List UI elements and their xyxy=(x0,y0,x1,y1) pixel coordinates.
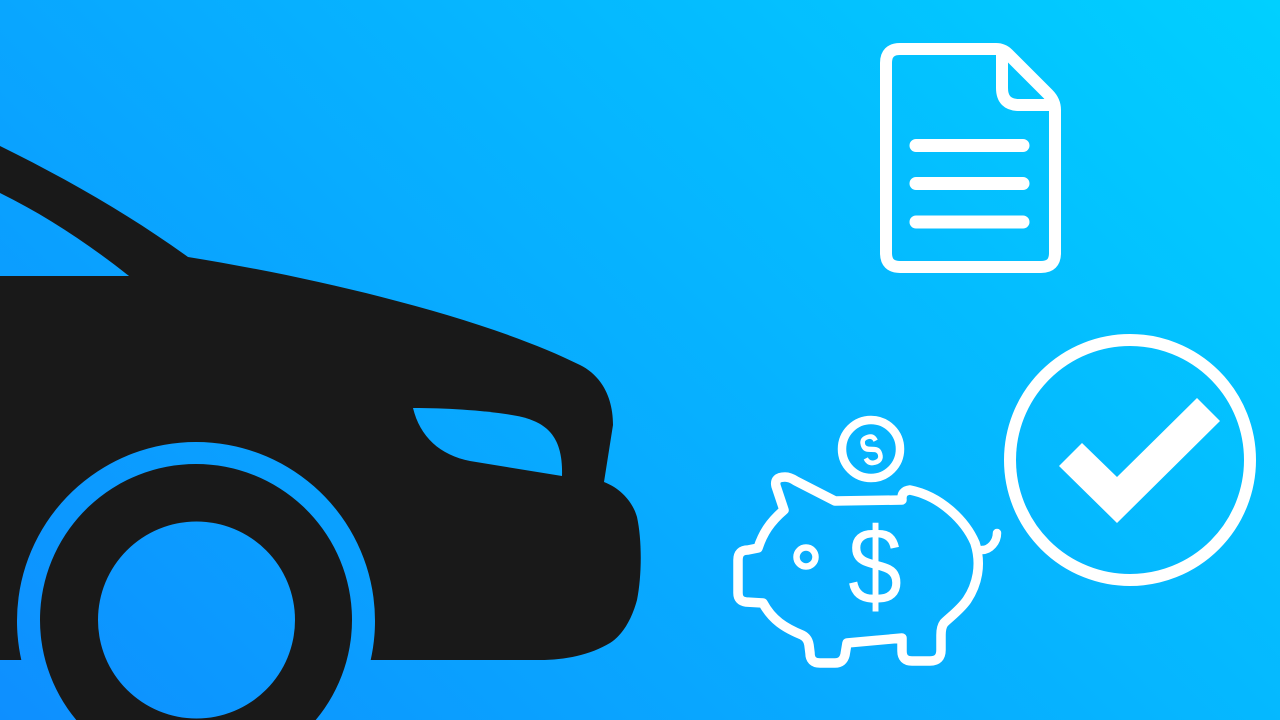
icon: car silhouette xyxy=(0,146,641,720)
car body xyxy=(0,146,641,660)
check mark xyxy=(1059,398,1220,523)
document outline xyxy=(886,49,1055,267)
wheel arch xyxy=(17,442,375,720)
folded corner xyxy=(1002,52,1054,105)
icon: piggy bank xyxy=(738,420,997,663)
pig tail xyxy=(982,533,997,550)
wheel hub xyxy=(98,522,295,718)
coin ring xyxy=(842,420,900,478)
coin letter: S xyxy=(854,424,889,477)
car window xyxy=(0,193,129,276)
car headlight xyxy=(413,408,562,476)
dollar sign: $ xyxy=(848,504,902,627)
icon: document xyxy=(886,49,1055,267)
document text lines xyxy=(916,146,1023,222)
coin xyxy=(842,420,900,478)
pig outline xyxy=(738,477,978,663)
pig eye xyxy=(796,548,816,566)
badge ring xyxy=(1010,340,1250,580)
icon: check mark badge xyxy=(1010,340,1250,580)
tire xyxy=(40,464,352,720)
